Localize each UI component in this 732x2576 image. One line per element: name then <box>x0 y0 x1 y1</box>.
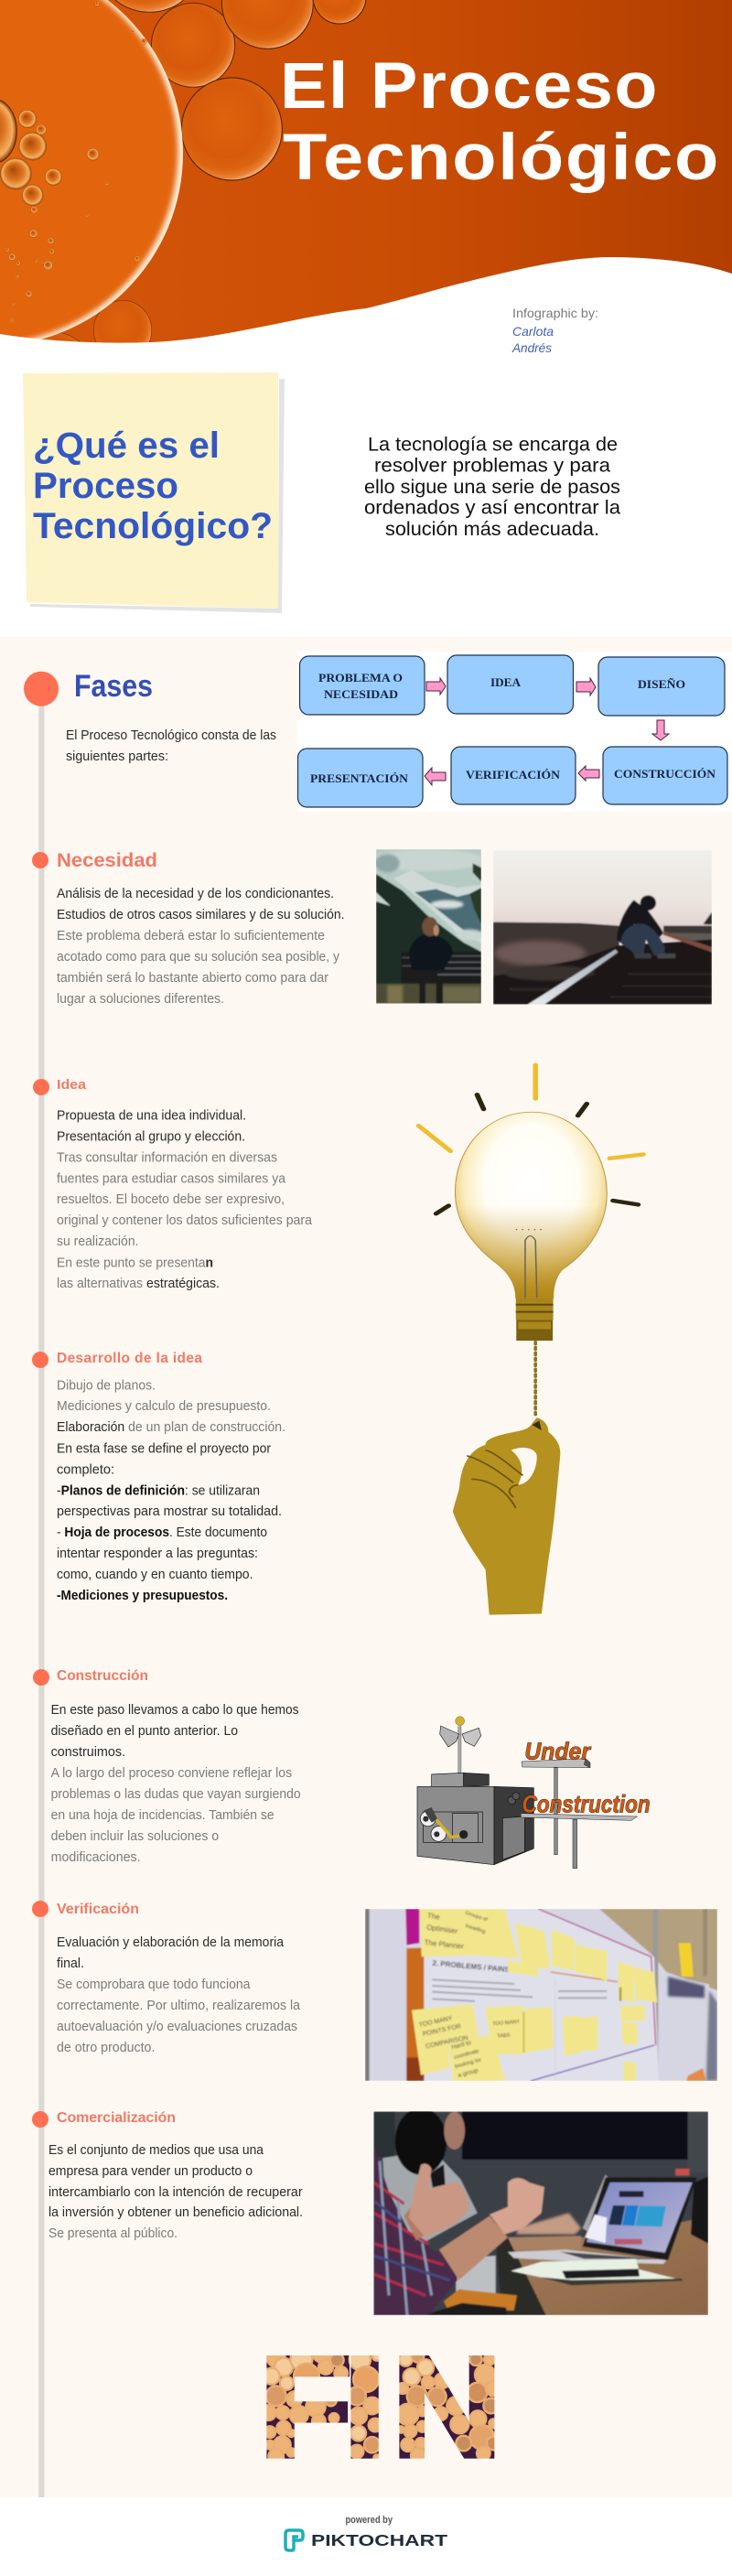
flowchart: process phases: PRESENTACIÓN <box>310 771 409 785</box>
text: Comercialización: empresa para vender un producto o <box>48 2164 253 2179</box>
text: Desarrollo de la idea <box>57 1378 285 1603</box>
flowchart: process phases <box>297 652 732 812</box>
text: Comercialización: Es el conjunto de medios que usa una <box>48 2143 264 2158</box>
text: Necesidad: también será lo bastante abierto como para dar <box>57 971 328 986</box>
text: Idea <box>57 1109 313 1291</box>
photo: wall board with sticky notes: POINTS FOR <box>422 2023 462 2038</box>
photo: wall board with sticky notes <box>365 1909 717 2081</box>
text: Idea: las alternativas estratégicas. <box>57 1277 220 1291</box>
text: Fases intro: siguientes partes: <box>66 749 168 764</box>
heading: what is the process: ¿Qué es el <box>33 426 220 466</box>
heading: what is the process <box>33 426 273 546</box>
text: Construcción: en una hoja de incidencias. También se <box>51 1808 274 1823</box>
text: Verificación: Evaluación y elaboración de la memoria <box>57 1935 285 1950</box>
text: Desarrollo de la idea: como, cuando y en cuanto tiempo. <box>57 1568 253 1582</box>
text: Verificación: correctamente. Por ultimo, realizaremos la <box>57 1999 301 2013</box>
photo: wall board with sticky notes: COMPARISON <box>425 2035 468 2050</box>
photo: wall board with sticky notes: Optimiser <box>426 1923 458 1935</box>
photo: wall board with sticky notes: The Planner <box>424 1938 465 1951</box>
flowchart: process phases: PROBLEMA O <box>318 671 403 684</box>
flowchart: process phases: CONSTRUCCIÓN <box>614 767 716 781</box>
panel: hero banner <box>0 0 732 395</box>
text filled with log texture: FIN: FIN <box>260 2329 501 2486</box>
sign text: Construction <box>522 1791 651 1818</box>
text: Verificación: de otro producto. <box>57 2041 155 2055</box>
white wave below hero <box>0 257 732 641</box>
text: Desarrollo de la idea: Dibujo de planos. <box>57 1378 156 1393</box>
text: Construcción <box>51 1703 301 1865</box>
text: Idea: original y contener los datos suficientes para <box>57 1213 313 1228</box>
machine antenna <box>440 1717 481 1773</box>
text: Idea: resueltos. El boceto debe ser expresivo, <box>57 1192 285 1207</box>
icon: bulb glass <box>455 1112 607 1299</box>
heading: Construcción: Construcción <box>57 1668 148 1684</box>
panel: cream timeline background <box>0 637 732 2497</box>
flowchart: process phases: DISEÑO <box>638 677 685 691</box>
text: Verificación: autoevaluación y/o evaluaciones cruzadas <box>57 2020 297 2034</box>
author credit: Infographic by: <box>512 306 598 320</box>
text: Fases intro: El Proceso Tecnológico consta de las <box>66 728 276 743</box>
illustration: under construction machine <box>417 1717 651 1869</box>
heading: Idea: Idea <box>57 1077 87 1093</box>
text: Construcción: deben incluir las soluciones o <box>51 1829 219 1844</box>
text: Necesidad <box>57 887 344 1007</box>
machine body <box>417 1773 533 1865</box>
photo: person crouching on railway <box>493 850 712 1005</box>
text: Idea: Tras consultar información en diversas <box>57 1150 277 1165</box>
timeline dot: Necesidad <box>32 852 48 868</box>
intro text: La tecnología se encarga de <box>368 434 618 456</box>
heading: Desarrollo de la idea: Desarrollo de la idea <box>57 1351 202 1366</box>
text: Desarrollo de la idea: Mediciones y calculo de presupuesto. <box>57 1399 271 1414</box>
intro text: resolver problemas y para <box>374 455 610 477</box>
machine crank <box>424 1807 468 1838</box>
heading: Fases: Fases <box>74 669 153 704</box>
text: Construcción: problemas o las dudas que vayan surgiendo <box>51 1787 301 1802</box>
flowchart: process phases: IDEA <box>490 675 522 689</box>
timeline dot: Fases <box>24 672 59 706</box>
author credit: Andrés <box>511 340 552 355</box>
sign text <box>522 1738 651 1818</box>
photo: person on bench facing mountains <box>369 849 485 1004</box>
footer: powered by Piktochart <box>285 2515 447 2550</box>
sign text: Under <box>524 1738 592 1765</box>
icon: Piktochart logo mark <box>285 2530 303 2550</box>
intro text: solución más adecuada. <box>385 518 599 540</box>
flowchart: process phases: VERIFICACIÓN <box>466 768 561 781</box>
photo: wall board with sticky notes: TOO MANY <box>418 2015 453 2029</box>
text: Comercialización <box>48 2143 303 2241</box>
text: Verificación: final. <box>57 1956 84 1971</box>
panel: sticky note question <box>23 372 285 613</box>
heading: what is the process: Proceso <box>33 466 178 506</box>
timeline dot: Comercialización <box>32 2111 48 2128</box>
text: Desarrollo de la idea: -Mediciones y presupuestos. <box>57 1589 228 1603</box>
text: Idea: Presentación al grupo y elección. <box>57 1129 245 1144</box>
timeline dot: Verificación <box>32 1901 48 1917</box>
photo: wall board with sticky notes: 2. PROBLEMS / PAINS <box>432 1959 511 1974</box>
heading: Necesidad: Necesidad <box>57 850 157 871</box>
timeline dot: Desarrollo de la idea <box>32 1352 48 1368</box>
text: Verificación: Se comprobara que todo funciona <box>57 1978 251 1992</box>
heading: Comercialización: Comercialización <box>57 2110 176 2126</box>
author credit: Carlota <box>512 324 554 339</box>
sign posts <box>521 1759 638 1869</box>
photo: wall board with sticky notes: TABS <box>497 2032 511 2040</box>
text: Desarrollo de la idea: Elaboración de un plan de construcción. <box>57 1420 285 1435</box>
photo: wall board with sticky notes: TOO MANY <box>492 2020 521 2027</box>
author credit <box>511 306 598 355</box>
icon: bulb screw base <box>516 1299 554 1341</box>
text: Desarrollo de la idea: -Planos de definición: se utilizaran <box>57 1483 260 1498</box>
text: Necesidad: acotado como para que su solución sea posible, y <box>57 950 340 965</box>
photo: wall board with sticky notes: a group <box>458 2067 479 2079</box>
photo: wall board with sticky notes: Hard to <box>451 2040 472 2051</box>
intro text: ello sigue una serie de pasos <box>364 476 620 498</box>
photo: wall board with sticky notes: coordinate <box>454 2049 480 2061</box>
photo: meeting with laptop and gesturing hands <box>373 2107 708 2315</box>
text: Fases intro <box>66 728 276 764</box>
text: Verificación <box>57 1935 301 2055</box>
text: Necesidad: Estudios de otros casos similares y de su solución. <box>57 908 344 922</box>
text: Comercialización: la inversión y obtener un beneficio adicional. <box>48 2205 303 2220</box>
text: Necesidad: Análisis de la necesidad y de los condicionantes. <box>57 887 334 901</box>
text: Idea: fuentes para estudiar casos similares ya <box>57 1171 286 1186</box>
icon: filament <box>516 1230 546 1299</box>
text: Construcción: En este paso llevamos a cabo lo que hemos <box>51 1703 299 1718</box>
text: Desarrollo de la idea: perspectivas para mostrar su totalidad. <box>57 1504 282 1519</box>
icon: bead chain <box>533 1342 539 1417</box>
icon: light rays <box>419 1065 643 1213</box>
text: Construcción: construimos. <box>51 1745 125 1760</box>
text: Idea: En este punto se presentan <box>57 1256 213 1270</box>
illustration: light bulb pulled by a hand <box>419 1065 643 1615</box>
timeline dot: Construcción <box>33 1669 49 1686</box>
text: Construcción: diseñado en el punto anterior. Lo <box>51 1724 238 1739</box>
text: Desarrollo de la idea: - Hoja de procesos. Este documento <box>57 1525 267 1540</box>
footer: powered by Piktochart: PIKTOCHART <box>311 2531 447 2549</box>
text: Comercialización: Se presenta al público. <box>48 2226 178 2241</box>
hero photo: orange oil bubbles <box>0 0 366 395</box>
text: Construcción: A lo largo del proceso conviene reflejar los <box>51 1766 292 1781</box>
text: Desarrollo de la idea: intentar responder a las preguntas: <box>57 1547 258 1561</box>
photo: wall board with sticky notes: booking for <box>455 2057 482 2070</box>
photo: wall board with sticky notes: travelling <box>465 1924 486 1935</box>
text: Comercialización: intercambiarlo con la intención de recuperar <box>48 2185 303 2200</box>
title <box>280 50 720 194</box>
intro text <box>364 434 620 540</box>
footer: powered by Piktochart: powered by <box>346 2515 393 2526</box>
icon: hand <box>453 1417 560 1615</box>
text: Desarrollo de la idea: completo: <box>57 1462 114 1477</box>
flowchart: process phases: NECESIDAD <box>324 687 398 701</box>
title: El Proceso <box>280 50 659 123</box>
heading: what is the process: Tecnológico? <box>33 506 273 546</box>
text: Idea: Propuesta de una idea individual. <box>57 1109 246 1124</box>
text: Necesidad: Este problema deberá estar lo suficientemente <box>57 929 325 943</box>
text: Construcción: modificaciones. <box>51 1850 141 1865</box>
photo: wall board with sticky notes: The <box>426 1912 441 1922</box>
intro text: ordenados y así encontrar la <box>364 497 620 519</box>
text: Desarrollo de la idea: En esta fase se define el proyecto por <box>57 1442 271 1457</box>
heading: Verificación: Verificación <box>57 1902 139 1917</box>
timeline bar <box>38 705 44 2497</box>
text: Idea: su realización. <box>57 1234 139 1249</box>
title: Tecnológico <box>283 122 720 194</box>
text: Necesidad: lugar a soluciones diferentes. <box>57 992 224 1007</box>
photo: wall board with sticky notes: Groups of <box>465 1911 489 1923</box>
timeline dot: Idea <box>33 1079 49 1095</box>
